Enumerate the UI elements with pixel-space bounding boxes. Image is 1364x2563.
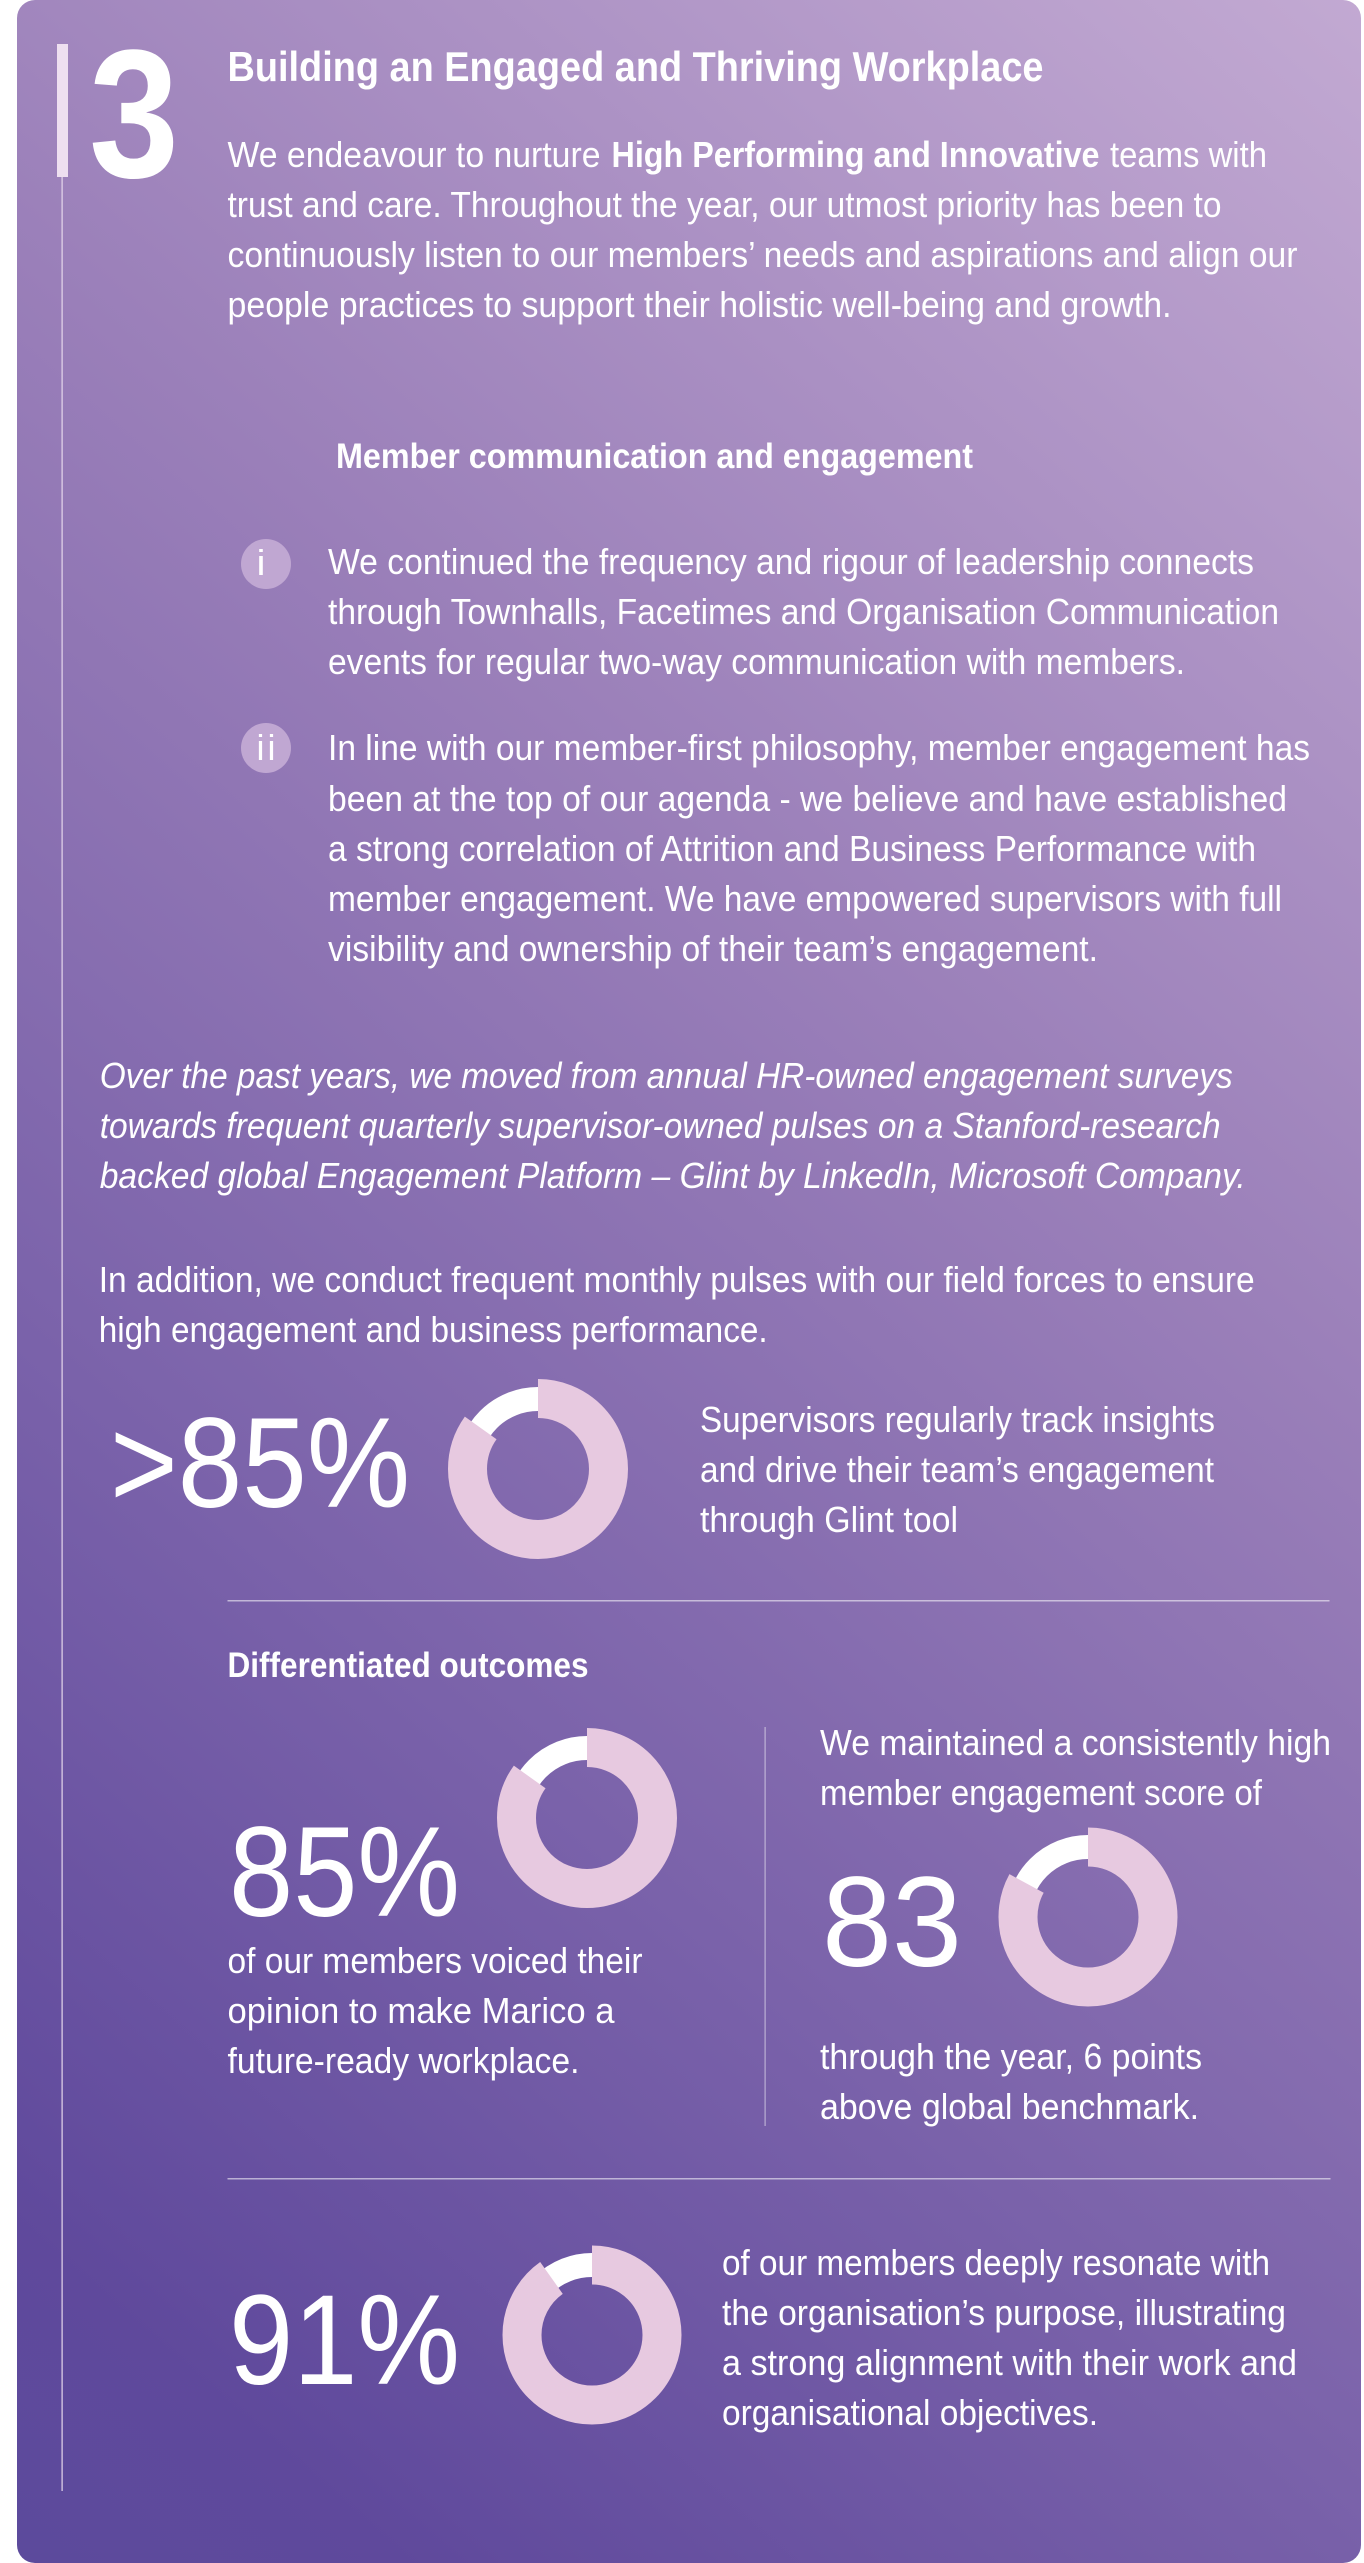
intro paragraph: continuously listen to our members’ needs and aspirations and align our [228,234,1298,275]
donut chart: score 83 [1018,1847,1158,1987]
text: supervisors track insights: Supervisors regularly track insights [700,1399,1215,1440]
paragraph: monthly pulses: In addition, we conduct frequent monthly pulses with our field forces to ensure [99,1259,1255,1300]
intro paragraph [228,134,1298,325]
text: members voiced opinion [228,1940,643,2081]
list item i [241,539,1279,682]
donut chart: 85% supervisors [468,1398,608,1540]
subheading: member communication: Member communication and engagement [336,437,973,476]
list item ii: visibility and ownership of their team’s engagement. [328,928,1098,969]
list item ii [241,723,1310,969]
list item ii: been at the top of our agenda - we believe and have established [328,778,1287,819]
intro paragraph: High Performing and Innovative [612,134,1100,175]
text: members resonate with purpose [722,2242,1297,2433]
list item ii: member engagement. We have empowered supervisors with full [328,878,1282,919]
subheading: differentiated outcomes: Differentiated outcomes [228,1646,588,1685]
list item i: events for regular two-way communication with members. [328,641,1185,682]
list item i: i [256,542,266,583]
intro paragraph: We endeavour to nurture [228,134,600,175]
italic paragraph: backed global Engagement Platform – Glint by LinkedIn, Microsoft Company. [100,1155,1246,1196]
list item i: We continued the frequency and rigour of leadership connects [328,541,1254,582]
italic paragraph: Over the past years, we moved from annual HR-owned engagement surveys [100,1055,1233,1096]
text: members voiced opinion: opinion to make Marico a [228,1990,615,2031]
paragraph: monthly pulses [99,1259,1255,1350]
text: above global benchmark: through the year, 6 points [820,2036,1202,2077]
title: Building an Engaged and Thriving Workplace [228,43,1044,90]
donut chart: 85% voiced opinion [516,1748,658,1888]
intro paragraph: people practices to support their holistic well-being and growth. [228,284,1172,325]
text: members resonate with purpose: a strong alignment with their work and [722,2342,1297,2383]
intro paragraph: teams with [1110,134,1267,175]
text: supervisors track insights [700,1399,1215,1540]
paragraph: monthly pulses: high engagement and business performance. [99,1309,768,1350]
list item ii: ii [256,727,276,768]
text: above global benchmark: above global benchmark. [820,2086,1199,2127]
section number 3 with bar and rule [57,11,179,2491]
text: members resonate with purpose: organisational objectives. [722,2392,1098,2433]
text: members voiced opinion: of our members voiced their [228,1940,643,1981]
text: members resonate with purpose: the organisation’s purpose, illustrating [722,2292,1286,2333]
italic paragraph: towards frequent quarterly supervisor-owned pulses on a Stanford-research [100,1105,1221,1146]
text: supervisors track insights: and drive their team’s engagement [700,1449,1214,1490]
list item i: through Townhalls, Facetimes and Organisation Communication [328,591,1279,632]
stat: >85%: >85% [110,1392,410,1535]
stat: 85%: 85% [229,1801,460,1944]
list item ii: a strong correlation of Attrition and Business Performance with [328,828,1256,869]
text: engagement score intro [820,1722,1331,1813]
text: members resonate with purpose: of our members deeply resonate with [722,2242,1270,2283]
intro paragraph: trust and care. Throughout the year, our utmost priority has been to [228,184,1222,225]
text: supervisors track insights: through Glint tool [700,1499,958,1540]
list item ii: In line with our member-first philosophy, member engagement has [328,727,1310,768]
stat: 91%: 91% [229,2269,460,2412]
text: above global benchmark [820,2036,1202,2127]
text: engagement score intro: We maintained a consistently high [820,1722,1331,1763]
section number 3 with bar and rule: 3 [89,11,179,216]
text: engagement score intro: member engagement score of [820,1772,1263,1813]
donut chart: 91% purpose [522,2265,662,2405]
italic paragraph [100,1055,1246,1196]
stat: 83: 83 [822,1851,962,1994]
text: members voiced opinion: future-ready workplace. [228,2040,580,2081]
